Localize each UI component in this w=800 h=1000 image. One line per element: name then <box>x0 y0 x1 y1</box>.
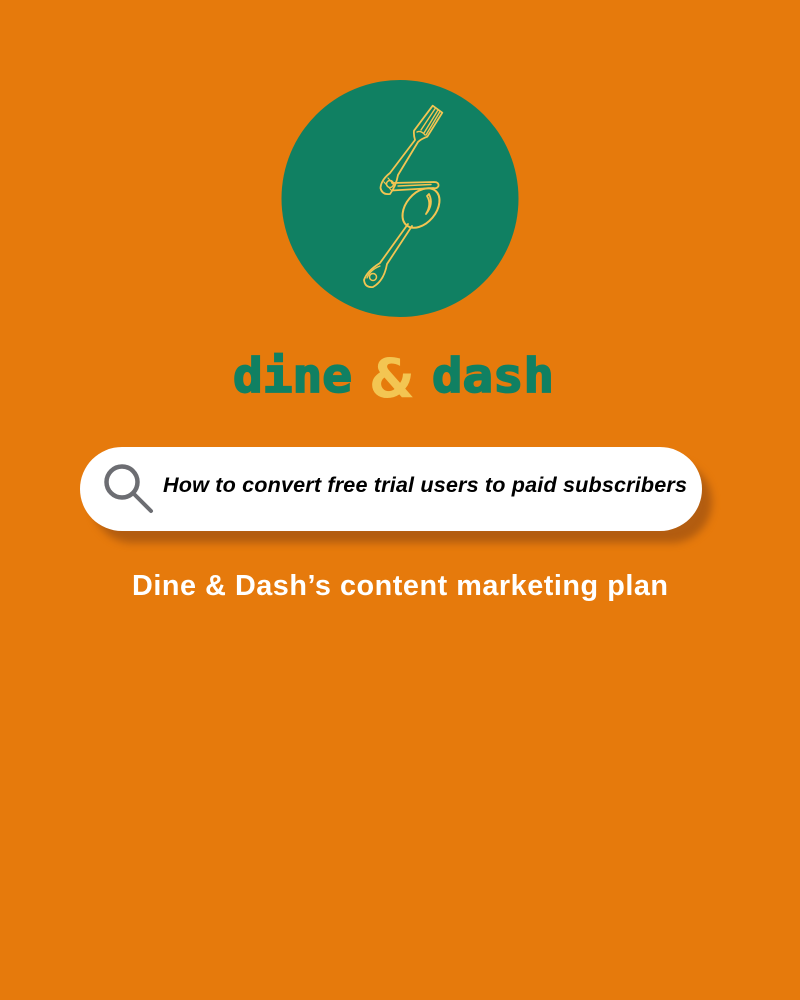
wordmark: dine & dash <box>233 347 554 410</box>
logo: green circle with fork and spoon <box>282 80 518 317</box>
fork <box>380 106 442 194</box>
search query text: How to convert free trial users to paid subscribers <box>163 472 687 497</box>
ampersand: & <box>369 347 415 410</box>
icon: magnifying glass <box>104 464 154 514</box>
word: dine: dine <box>233 349 352 404</box>
fork-spoon connecting bar <box>392 182 439 190</box>
spoon <box>364 181 447 287</box>
subtitle: Dine & Dash’s content marketing plan <box>132 570 668 602</box>
logo background circle <box>282 80 518 317</box>
word: dash: dash <box>432 349 554 404</box>
icon: fork and spoon <box>364 106 447 287</box>
search bar <box>80 447 702 531</box>
